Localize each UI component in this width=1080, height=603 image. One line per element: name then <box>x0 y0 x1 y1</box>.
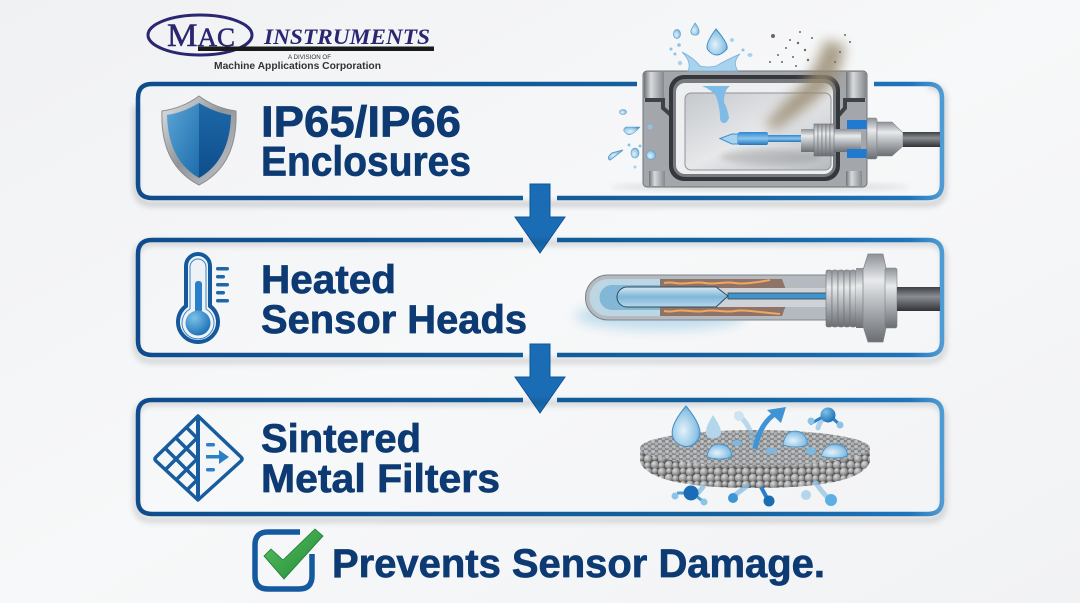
icon: thermometer <box>178 254 229 342</box>
panel: IP65/IP66 Enclosures <box>136 23 944 204</box>
heading: Heated Sensor Heads: Sensor Heads <box>261 298 527 342</box>
illustration: heated sensor head cutaway <box>575 254 940 342</box>
illustration: sintered metal filter disk <box>640 406 870 506</box>
panel: Heated Sensor Heads <box>136 240 944 361</box>
heading: IP65/IP66 Enclosures <box>261 98 471 184</box>
icon: shield <box>162 96 236 185</box>
logo: MAC Instruments <box>148 15 434 72</box>
heading: Heated Sensor Heads <box>261 258 527 342</box>
logo: MAC Instruments: Machine Applications Corporation <box>214 61 381 72</box>
heading: Heated Sensor Heads: Heated <box>261 258 396 302</box>
heading: Sintered Metal Filters <box>261 417 500 501</box>
statement text: Prevents Sensor Damage. <box>332 542 825 586</box>
icon: filter diamond <box>155 416 242 500</box>
molecules <box>672 408 844 506</box>
conclusion: prevents sensor damage <box>255 529 825 589</box>
arrow: step 1 to 2 <box>515 184 565 253</box>
panel: Sintered Metal Filters <box>136 400 944 520</box>
logo: MAC Instruments: INSTRUMENTS <box>263 24 430 49</box>
water splash <box>608 23 752 168</box>
heading: IP65/IP66 Enclosures: IP65/IP66 <box>261 98 461 146</box>
illustration: sealed enclosure with water and dust <box>608 23 940 191</box>
dust plume <box>765 31 851 130</box>
heading: Sintered Metal Filters: Metal Filters <box>261 457 500 501</box>
logo: MAC Instruments: MAC <box>167 18 235 54</box>
heading: IP65/IP66 Enclosures: Enclosures <box>261 138 471 184</box>
heading: Sintered Metal Filters: Sintered <box>261 417 421 461</box>
logo: MAC Instruments: A DIVISION OF <box>288 54 331 61</box>
arrow: step 2 to 3 <box>515 344 565 413</box>
icon: green checkmark in box <box>255 529 323 589</box>
